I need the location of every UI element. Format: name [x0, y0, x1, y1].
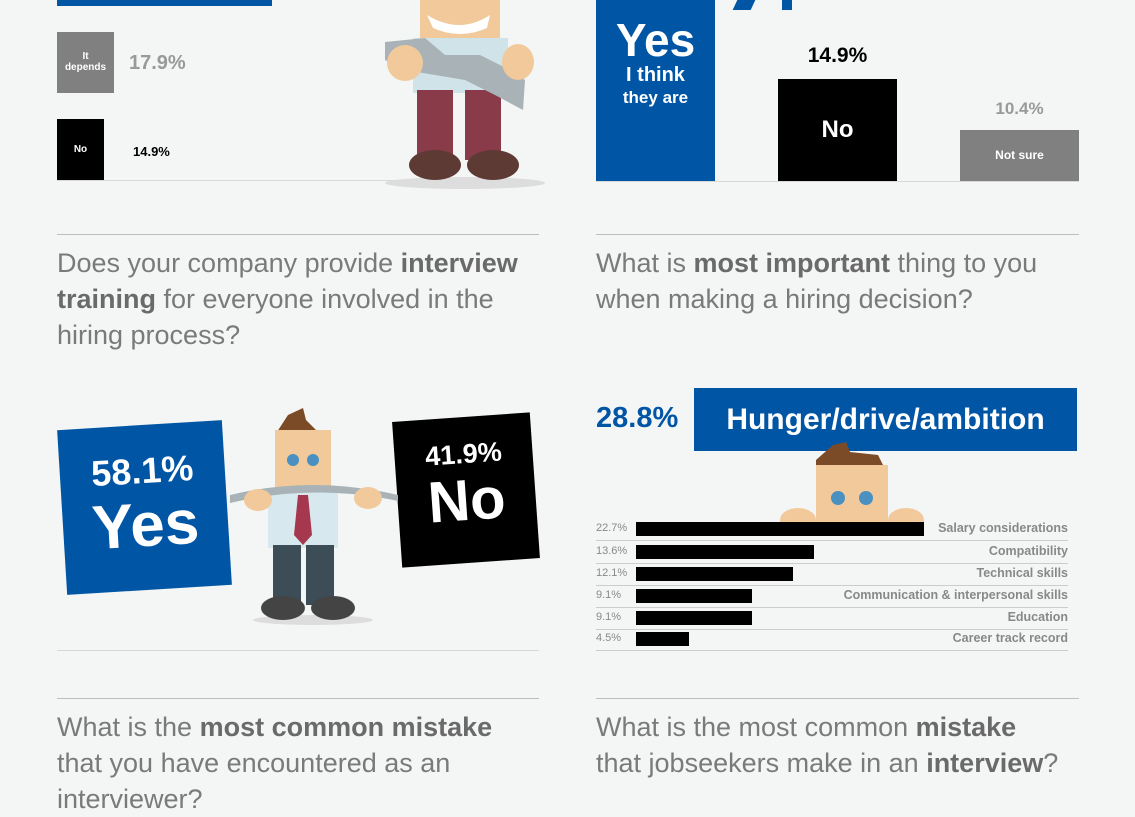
bar chart: Technical skills — [977, 566, 1068, 580]
box: it depends: It — [82, 51, 89, 62]
peeking character — [780, 442, 924, 522]
yes box rotated — [57, 420, 232, 595]
box: no: No — [822, 116, 854, 143]
top-right: yes box: Yes — [616, 14, 695, 66]
value 14.9%: 14.9% — [808, 44, 867, 67]
character with wrench — [385, 0, 545, 189]
box: no: No — [74, 144, 87, 155]
box: no — [778, 79, 897, 181]
bar chart: Education — [1008, 610, 1068, 624]
bar chart: Communication & interpersonal skills — [844, 588, 1068, 602]
value 14.9%: 14.9% — [133, 144, 170, 159]
blue glyph fragment — [733, 0, 755, 10]
value 10.4%: 10.4% — [995, 99, 1044, 118]
box: not sure: Not sure — [995, 148, 1044, 162]
bar chart: 9.1% — [596, 611, 621, 623]
top-right: yes box — [596, 0, 715, 181]
no box rotated: No — [426, 465, 508, 536]
no box rotated — [392, 412, 540, 568]
bar chart: 12.1% — [596, 567, 627, 579]
box: no — [57, 119, 104, 181]
bar chart: Salary considerations — [938, 521, 1068, 535]
box: it depends: depends — [65, 62, 106, 73]
question: most common mistake: What is the most common mistake that you have encountered as an interviewer? — [57, 712, 492, 814]
hunger box — [694, 388, 1077, 451]
bar chart: 4.5% — [596, 632, 621, 644]
question: interview training: Does your company provide interview training for everyone involved in the hiring process? — [57, 248, 518, 350]
top-left blue bar — [57, 0, 272, 6]
box: not sure — [960, 130, 1079, 181]
no box rotated: 41.9% — [424, 436, 503, 472]
hunger box: Hunger/drive/ambition — [726, 403, 1045, 436]
character holding bar — [230, 408, 398, 625]
question: jobseekers mistake: What is the most common mistake that jobseekers make in an interview? — [596, 712, 1058, 778]
bar chart: 22.7% — [596, 522, 627, 534]
box: it depends — [57, 32, 114, 93]
top-right: yes box: I think — [626, 64, 685, 86]
bar chart — [596, 521, 1068, 651]
value 17.9%: 17.9% — [129, 52, 186, 74]
question: most important: What is most important thing to you when making a hiring decision? — [596, 248, 1037, 314]
bar chart: 13.6% — [596, 545, 627, 557]
yes box rotated: 58.1% — [90, 447, 194, 494]
bar chart: Career track record — [953, 631, 1068, 645]
bar chart: 9.1% — [596, 589, 621, 601]
value 28.8%: 28.8% — [596, 402, 678, 434]
bar chart: Compatibility — [989, 544, 1068, 558]
top-right: yes box: they are — [623, 88, 688, 107]
yes box rotated: Yes — [90, 488, 201, 563]
